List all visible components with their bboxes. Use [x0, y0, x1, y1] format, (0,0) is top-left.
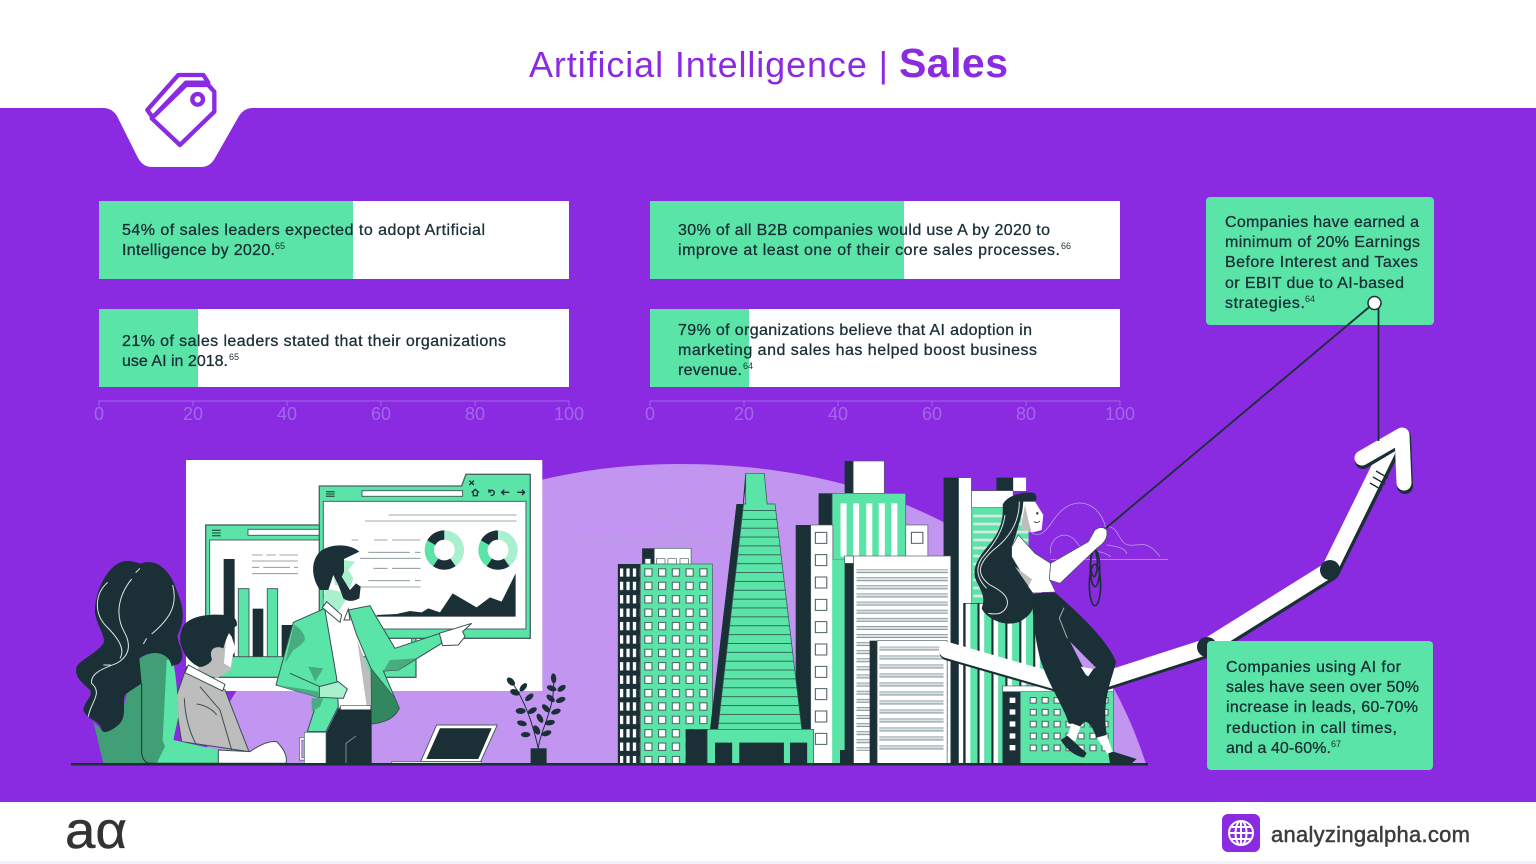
man presenting — [276, 545, 472, 764]
woman seated — [76, 561, 286, 763]
clouds — [580, 479, 1168, 559]
left axis: 60 — [371, 404, 391, 424]
footer strip — [0, 861, 1536, 864]
right axis: 100 — [1105, 404, 1135, 424]
callout: leads: Companies using AI for — [1226, 659, 1402, 676]
left axis: 20 — [183, 404, 203, 424]
callout: leads: 67 — [1331, 739, 1341, 749]
title — [529, 40, 1008, 86]
callout: earnings: minimum of 20% Earnings — [1225, 234, 1420, 251]
bar: 54% of sales leaders: 54% of sales leaders expected to adopt Artificial — [122, 222, 485, 239]
coffee mug — [301, 732, 326, 764]
area chart — [377, 573, 516, 617]
bar: 79% of organizations: revenue. — [678, 362, 742, 379]
callout: leads — [1207, 641, 1433, 770]
left axis: 100 — [554, 404, 584, 424]
callout: earnings: or EBIT due to AI-based — [1225, 275, 1404, 292]
callout: leads: reduction in call times, — [1226, 720, 1397, 737]
logo: aα — [65, 802, 127, 860]
light purple dome — [200, 464, 1146, 764]
callout: leads: sales have seen over 50% — [1226, 679, 1419, 696]
legs — [1032, 592, 1116, 738]
icon: price tags — [147, 75, 214, 145]
right axis: 20 — [734, 404, 754, 424]
shirt — [1012, 535, 1055, 592]
callout: earnings: 64 — [1305, 294, 1315, 304]
callout: earnings: Before Interest and Taxes — [1225, 254, 1418, 271]
pyramid tower — [686, 473, 814, 764]
callout: earnings: Companies have earned a — [1225, 214, 1419, 231]
office board and screens — [186, 460, 567, 764]
callout: earnings — [1206, 197, 1434, 325]
back chart window — [206, 525, 416, 677]
seated figures — [76, 561, 286, 763]
left axis: 80 — [465, 404, 485, 424]
bar: 30% of B2B companies — [650, 201, 1120, 279]
skyline — [580, 461, 1168, 764]
striped building — [845, 556, 951, 764]
laptop — [392, 725, 497, 764]
bar: 21% of sales leaders: 21% of sales leaders stated that their organizations — [122, 333, 506, 350]
callout: earnings: strategies. — [1225, 295, 1305, 312]
hair — [975, 492, 1037, 624]
bar: 30% of B2B companies: improve at least one of their core sales processes. — [678, 242, 1060, 259]
website url: analyzingalpha.com — [1271, 822, 1470, 847]
man seated — [175, 615, 249, 752]
rope coil — [1089, 550, 1101, 606]
tiered building — [796, 461, 928, 764]
donut chart 1 — [429, 535, 459, 565]
callout: leads: and a 40-60%. — [1226, 740, 1331, 757]
title: Artificial Intelligence | — [529, 44, 888, 85]
left axis: 40 — [277, 404, 297, 424]
bar: 54% of sales leaders: Intelligence by 2020. — [122, 242, 275, 259]
bar: 79% of organizations: 79% of organizations believe that AI adoption in — [678, 322, 1032, 339]
bar: 79% of organizations — [650, 309, 1120, 387]
bar: 30% of B2B companies: 66 — [1061, 241, 1071, 251]
bar: 79% of organizations: 64 — [743, 361, 753, 371]
back tall building — [944, 478, 1045, 764]
bar: 21% of sales leaders: use AI in 2018. — [122, 353, 228, 370]
right axis — [645, 401, 1135, 424]
face — [1021, 502, 1043, 533]
low green building — [1002, 686, 1114, 764]
left axis: 0 — [94, 404, 104, 424]
rising arrow — [947, 435, 1405, 690]
bar: 21% of sales leaders — [99, 309, 569, 387]
bar: 79% of organizations: marketing and sales has helped boost business — [678, 342, 1037, 359]
front dashboard window — [319, 474, 530, 638]
callout: leads: increase in leads, 60-70% — [1226, 699, 1418, 716]
bar: 30% of B2B companies: 30% of all B2B companies would use A by 2020 to — [678, 222, 1050, 239]
bar: 54% of sales leaders: 65 — [275, 241, 285, 251]
woman on arrow — [975, 492, 1137, 763]
potted plant — [505, 673, 567, 764]
right axis: 80 — [1016, 404, 1036, 424]
arm — [1049, 527, 1107, 583]
green grid building — [618, 548, 712, 764]
left axis — [94, 401, 584, 424]
bar: 21% of sales leaders: 65 — [229, 352, 239, 362]
icon: globe — [1222, 814, 1260, 852]
ropes and knot — [1106, 296, 1381, 528]
bar: 54% of sales leaders — [99, 201, 569, 279]
title: Sales — [899, 40, 1008, 86]
presentation board — [186, 460, 542, 691]
donut chart 2 — [483, 535, 513, 565]
ground line — [71, 763, 1148, 766]
right axis: 0 — [645, 404, 655, 424]
right axis: 40 — [828, 404, 848, 424]
right axis: 60 — [922, 404, 942, 424]
